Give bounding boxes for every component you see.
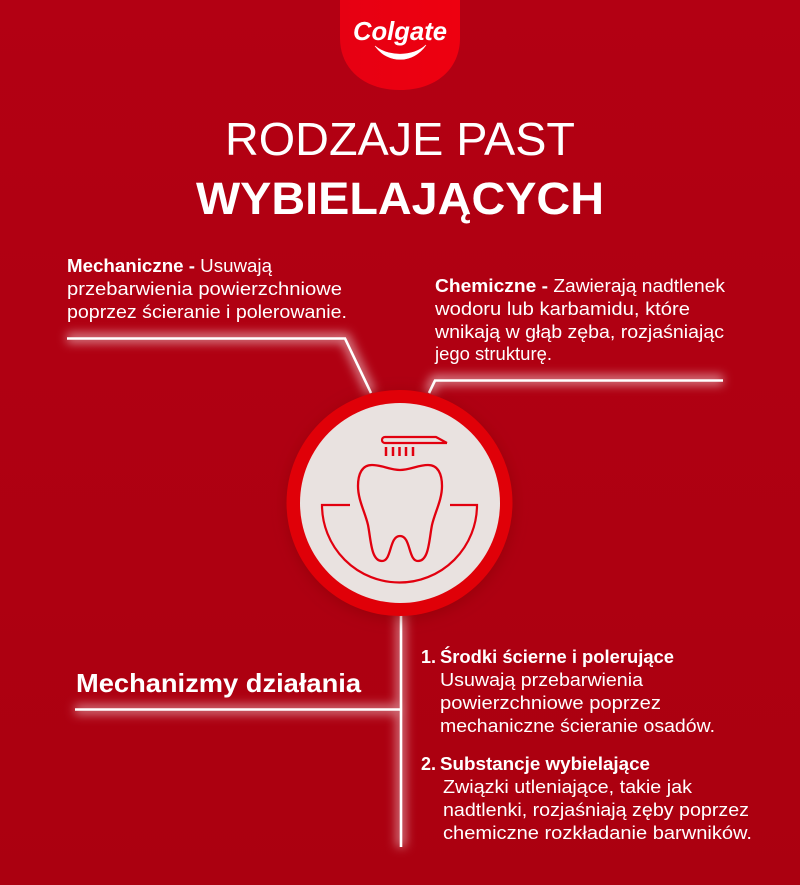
text block: mechaniczne: Mechaniczne - Usuwają: [67, 256, 273, 276]
icon: gum: [322, 505, 477, 582]
list item 1: 1.: [421, 647, 436, 667]
connector: mechanizmy: [75, 612, 401, 847]
list item 2: 2.: [421, 754, 436, 774]
list item 1: Usuwają przebarwienia: [440, 670, 644, 690]
text block: chemiczne: [434, 276, 726, 364]
title: RODZAJE PAST: [225, 113, 575, 165]
title: [196, 113, 604, 224]
text block: chemiczne: wodoru lub karbamidu, które: [434, 299, 690, 319]
logo smile: [375, 45, 426, 59]
list item 1: mechaniczne ścieranie osadów.: [440, 716, 715, 736]
text block: mechaniczne: przebarwienia powierzchniowe: [67, 279, 342, 299]
list item 2: [421, 754, 752, 843]
central circle icon: [286, 390, 514, 620]
list item 1: powierzchniowe poprzez: [440, 693, 661, 713]
icon: tooth: [358, 465, 442, 561]
text block: chemiczne: jego strukturę.: [434, 344, 552, 364]
text block: chemiczne: Chemiczne - Zawierają nadtlenek: [435, 276, 726, 296]
text block: mechaniczne: poprzez ścieranie i polerowanie.: [67, 302, 347, 322]
list item 2: nadtlenki, rozjaśniają zęby poprzez: [443, 800, 749, 820]
logo wordmark: Colgate: [353, 16, 447, 46]
list item 2: Związki utleniające, takie jak: [443, 777, 693, 797]
connector: chemiczne: [429, 380, 723, 393]
heading: mechanizmy działania: Mechanizmy działania: [76, 668, 362, 698]
connector: mechaniczne: [67, 338, 371, 393]
logo badge: [340, 0, 460, 90]
icon: toothbrush: [382, 437, 447, 456]
list item 2: Substancje wybielające: [440, 754, 650, 774]
title: WYBIELAJĄCYCH: [196, 173, 604, 224]
text block: mechaniczne: [67, 256, 347, 322]
text block: chemiczne: wnikają w głąb zęba, rozjaśniając: [434, 322, 724, 342]
list item 2: chemiczne rozkładanie barwników.: [443, 823, 752, 843]
list item 1: Środki ścierne i polerujące: [440, 646, 674, 667]
list item 1: [421, 646, 715, 736]
